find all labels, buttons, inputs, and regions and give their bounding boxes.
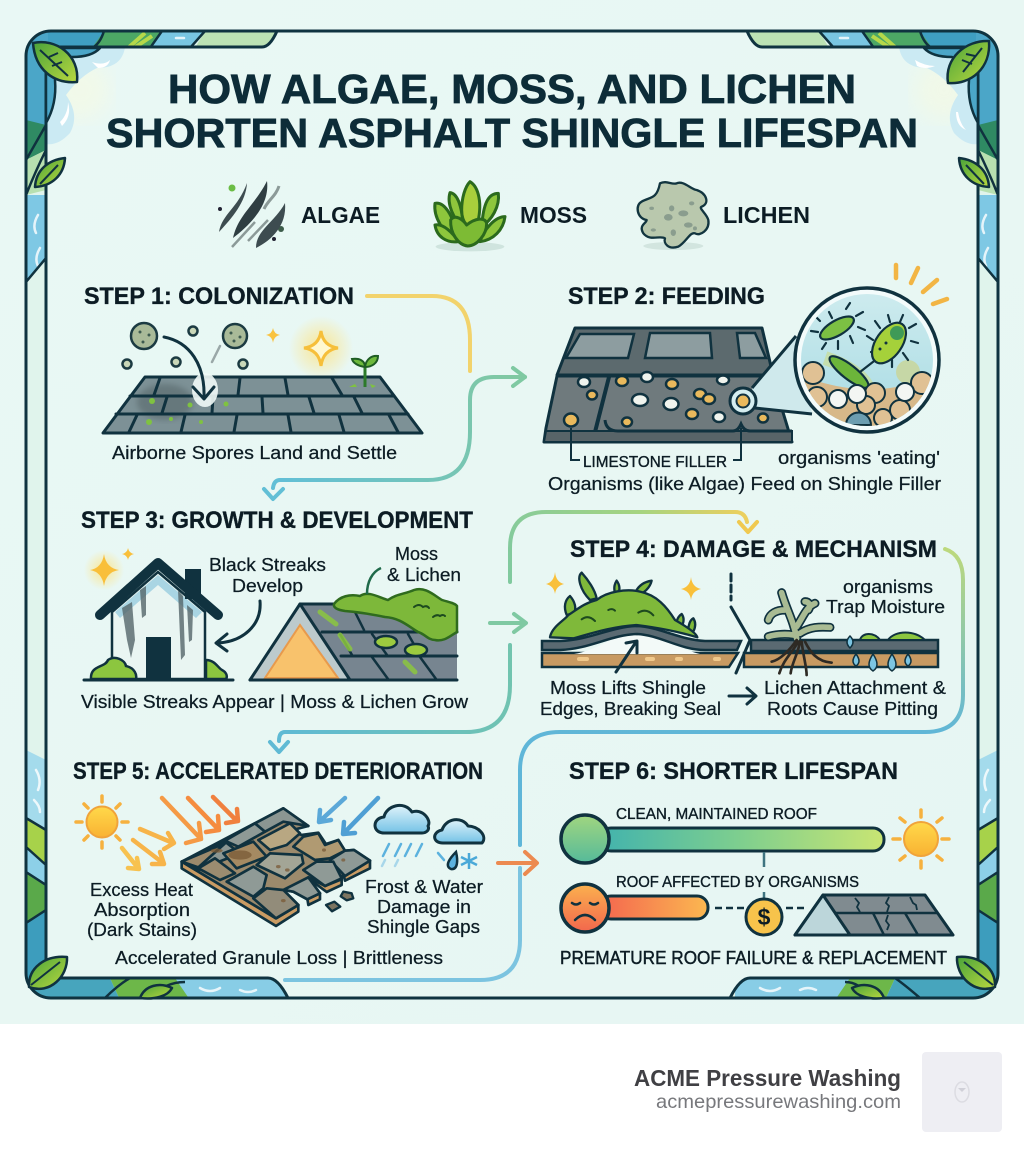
title: SHORTEN ASPHALT SHINGLE LIFESPAN — [106, 110, 918, 156]
decorative frame border — [26, 31, 998, 1000]
illustration: cracked roof — [795, 895, 953, 935]
label: moss lifts shingle: Moss Lifts Shingle — [550, 677, 706, 698]
caption: Accelerated Granule Loss | Brittleness — [115, 947, 443, 968]
heading: step 5: STEP 5: ACCELERATED DETERIORATION — [73, 758, 483, 785]
step 2 panel — [544, 265, 947, 494]
icon: sun — [893, 810, 949, 868]
label: affected roof: ROOF AFFECTED BY ORGANISMS — [616, 874, 859, 891]
arrow: step 3 to step 4 — [270, 512, 757, 752]
label: black streaks — [209, 554, 326, 596]
heading: step 2: STEP 2: FEEDING — [568, 283, 765, 310]
footer band — [0, 1024, 1024, 1154]
caption: Airborne Spores Land and Settle — [112, 442, 397, 463]
label: lichen attachment — [764, 677, 947, 719]
label: trap moisture: Trap Moisture — [826, 596, 945, 617]
crack marker — [731, 574, 750, 673]
icon: sun — [76, 796, 128, 848]
label: excess heat: (Dark Stains) — [87, 919, 197, 940]
heading: step 3: STEP 3: GROWTH & DEVELOPMENT — [81, 507, 473, 534]
cost dashes — [715, 907, 806, 909]
arrow: step 1 to step 2 — [264, 296, 525, 499]
label: frost and water: Shingle Gaps — [367, 916, 480, 937]
corner leaves — [29, 41, 995, 999]
label: lichen attachment: Roots Cause Pitting — [767, 698, 938, 719]
label: trap moisture: organisms — [843, 576, 933, 597]
illustration: roof with moss — [250, 568, 457, 680]
caption: PREMATURE ROOF FAILURE & REPLACEMENT — [560, 947, 947, 968]
icon: algae — [218, 181, 285, 248]
icon: clouds with rain and frost — [375, 805, 484, 869]
step 1 panel — [84, 283, 422, 463]
label: moss and lichen — [387, 543, 461, 585]
arrow: step 4 to step 5 and 6 — [285, 549, 963, 980]
label: excess heat — [87, 879, 197, 940]
label: moss and lichen: & Lichen — [387, 564, 461, 585]
logo placeholder — [922, 1052, 1002, 1132]
label: lichen attachment: Lichen Attachment & — [764, 677, 947, 698]
footer brand — [634, 1052, 1002, 1132]
label: clean roof: CLEAN, MAINTAINED ROOF — [616, 806, 817, 823]
label: frost and water — [365, 876, 483, 937]
illustration: shingle and filler — [544, 265, 947, 460]
caption: Visible Streaks Appear | Moss & Lichen Grow — [81, 691, 469, 712]
illustration: roof with spores — [103, 316, 422, 433]
icon: moss — [435, 182, 505, 251]
label: excess heat: Excess Heat — [90, 879, 193, 900]
icon: lichen — [638, 182, 708, 250]
title — [106, 66, 918, 156]
icon: dollar coin: $ — [758, 904, 771, 930]
legend: algae — [218, 181, 380, 248]
step 5 panel — [73, 758, 484, 968]
step 3 panel — [81, 507, 473, 712]
legend: algae: ALGAE — [301, 202, 380, 228]
label: limestone filler: LIMESTONE FILLER — [583, 454, 727, 471]
illustration: lichen roots and moisture — [744, 593, 938, 675]
legend: moss — [435, 182, 587, 251]
illustration: house with streaks — [84, 548, 260, 680]
label: moss lifts shingle — [540, 677, 721, 719]
illustration: damaged shingles — [182, 808, 370, 926]
heat arrows — [122, 797, 238, 869]
label: frost and water: Damage in — [377, 896, 471, 917]
label: trap moisture — [826, 576, 945, 617]
heading: step 4: STEP 4: DAMAGE & MECHANISM — [570, 536, 937, 563]
legend: moss: MOSS — [520, 202, 587, 228]
caption: Organisms (like Algae) Feed on Shingle Filler — [548, 473, 941, 494]
top corner water blobs — [46, 48, 978, 123]
label: moss lifts shingle: Edges, Breaking Seal — [540, 698, 721, 719]
brand url: acmepressurewashing.com — [656, 1091, 901, 1113]
brand name: ACME Pressure Washing — [634, 1065, 901, 1091]
label: black streaks: Black Streaks — [209, 554, 326, 575]
illustration: moss lifting shingle — [542, 572, 741, 672]
bar: affected roof lifespan — [561, 884, 708, 932]
icon: dollar coin — [746, 899, 782, 935]
legend: lichen: LICHEN — [723, 202, 810, 228]
arrow: moss to lichen — [729, 688, 756, 704]
label: black streaks: Develop — [232, 575, 303, 596]
label: frost and water: Frost & Water — [365, 876, 483, 897]
bar: clean roof lifespan — [561, 815, 884, 863]
heading: step 6: STEP 6: SHORTER LIFESPAN — [569, 758, 898, 785]
connector line — [763, 852, 765, 900]
legend: lichen — [638, 182, 810, 250]
label: organisms eating: organisms 'eating' — [778, 447, 940, 468]
title: HOW ALGAE, MOSS, AND LICHEN — [168, 66, 856, 112]
label: moss and lichen: Moss — [395, 543, 438, 564]
heading: step 1: STEP 1: COLONIZATION — [84, 283, 354, 310]
step 4 panel — [540, 536, 947, 719]
step 6 panel — [560, 758, 953, 968]
water arrows — [319, 798, 378, 834]
label: excess heat: Absorption — [94, 899, 190, 920]
